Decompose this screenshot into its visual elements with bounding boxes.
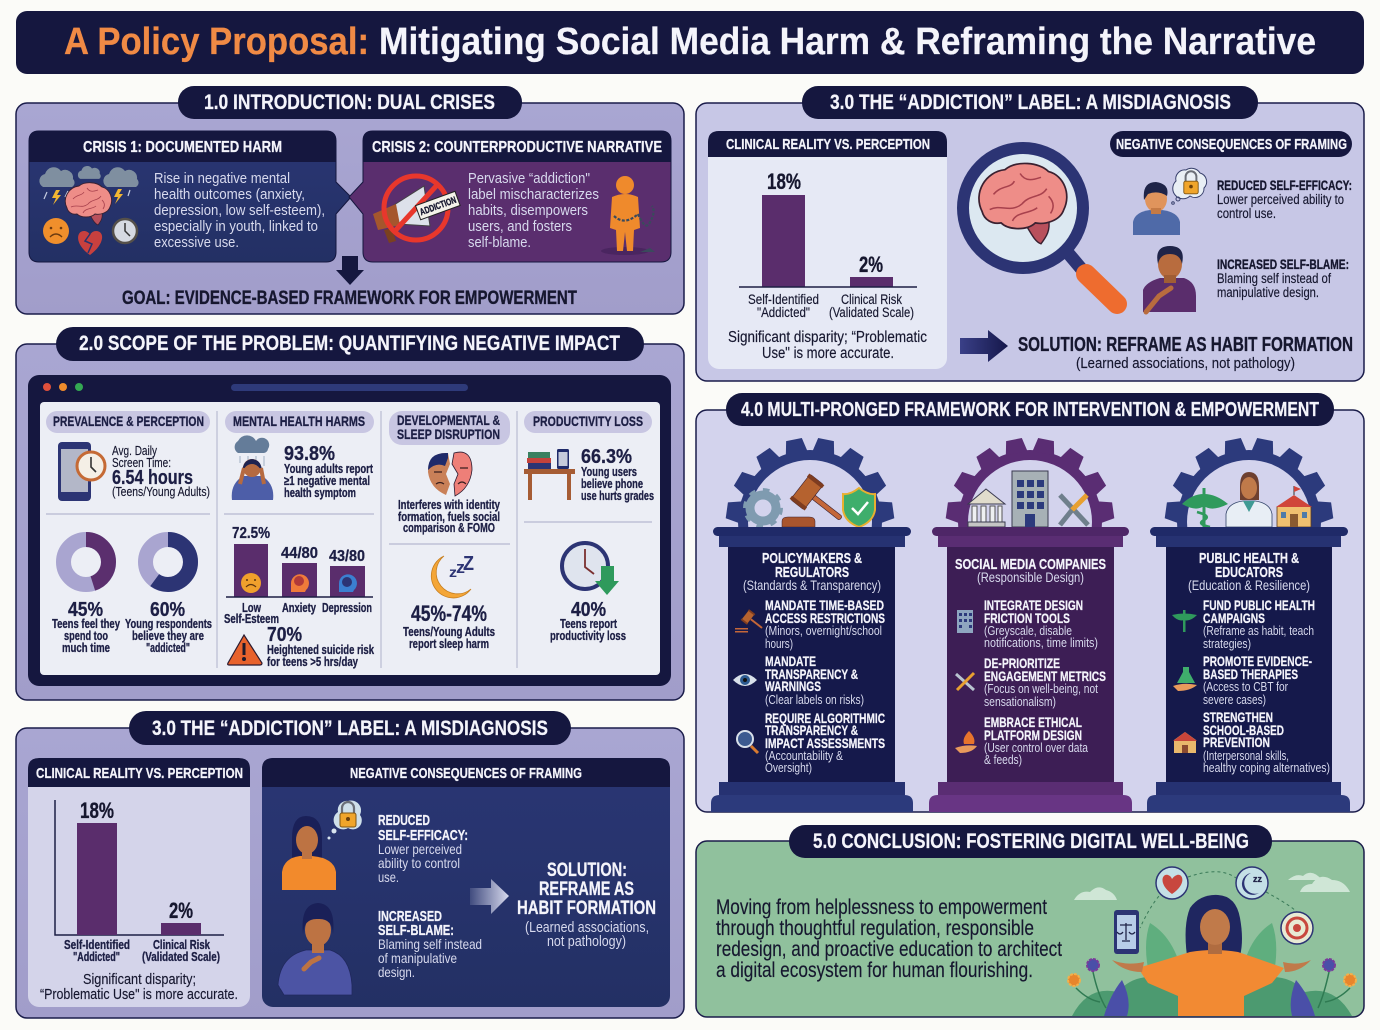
icon: target circle — [1281, 912, 1313, 944]
pillar: policymakers and regulators: TRANSPARENCY & — [765, 722, 858, 738]
bar chart: self-identified vs clinical: Self-Identified — [64, 938, 130, 952]
title banner: Mitigating Social Media Harm & Reframing the Narrative — [379, 21, 1316, 63]
card: negative consequences left: Lower perceived — [378, 841, 462, 857]
bar chart: self-identified vs clinical: (Validated Scale) — [142, 950, 220, 964]
pillar: public health and educators: severe cases) — [1203, 692, 1266, 707]
column: developmental and sleep disruption: Interferes with identity — [398, 498, 500, 512]
pillar: policymakers and regulators: IMPACT ASSESSMENTS — [765, 735, 885, 751]
column: mental health harms — [224, 411, 374, 669]
bar chart: self-identified vs clinical: "Addicted" — [73, 950, 120, 964]
icon: no addiction megaphone: ADDICTION — [418, 195, 458, 218]
icon: distressed person under cloud — [232, 435, 273, 500]
panel: 3.0 addiction label right: manipulative design. — [1217, 285, 1319, 300]
pillar: policymakers and regulators: (Accountability & — [765, 748, 843, 763]
column: prevalence and perception: 45% — [68, 599, 103, 621]
column: prevalence and perception: (Teens/Young Adults) — [112, 485, 210, 499]
column: mental health harms: 70% — [267, 624, 302, 646]
pillar: public health and educators: healthy coping alternatives) — [1203, 760, 1330, 775]
pillar: public health and educators: (Reframe as habit, teach — [1203, 623, 1314, 638]
heading: 3.0 addiction label left: 3.0 THE “ADDICTION” LABEL: A MISDIAGNOSIS — [152, 717, 548, 740]
icon: moon and zzz: Z — [463, 553, 474, 575]
icon: small tools — [956, 673, 974, 690]
text: conclusion statement: redesign, and proactive education to architect — [716, 938, 1062, 961]
browser window frame — [28, 375, 671, 686]
panel: 3.0 addiction label right: control use. — [1217, 206, 1276, 221]
column: mental health harms: 93.8% — [284, 443, 335, 465]
bar chart: self-identified vs clinical — [55, 798, 224, 964]
pillar: policymakers and regulators: REGULATORS — [775, 564, 849, 581]
card: crisis 1 documented harm: especially in youth, linked to — [154, 219, 318, 235]
card: clinical reality right: Significant disparity; “Problematic — [728, 329, 927, 346]
column: productivity loss: productivity loss — [550, 629, 626, 643]
column: productivity loss: Teens report — [560, 617, 618, 631]
pillar: policymakers and regulators: POLICYMAKERS & — [762, 550, 862, 567]
column: mental health harms: for teens >5 hrs/day — [267, 655, 358, 669]
panel: 3.0 addiction label left — [16, 711, 684, 1018]
column: mental health harms: Young adults report — [284, 462, 374, 476]
arrow: to solution right — [960, 330, 1008, 362]
card: crisis 2 counterproductive narrative: Pervasive “addiction" — [468, 171, 590, 187]
card: crisis 1 documented harm: Rise in negative mental — [154, 171, 290, 187]
heading: 1.0 introduction: 1.0 INTRODUCTION: DUAL CRISES — [204, 91, 495, 114]
pillar: policymakers and regulators: REQUIRE ALGORITHMIC — [765, 710, 885, 726]
pillar: policymakers and regulators: Oversight) — [765, 760, 812, 775]
card: negative consequences left: use. — [378, 869, 399, 885]
card: negative consequences left: NEGATIVE CONSEQUENCES OF FRAMING — [350, 765, 582, 782]
bar chart: self-identified vs clinical right: "Addicted" — [757, 305, 810, 320]
card: clinical reality right: CLINICAL REALITY VS. PERCEPTION — [726, 137, 930, 153]
column: prevalence and perception: spend too — [64, 629, 108, 643]
card: negative consequences left: Blaming self instead — [378, 936, 482, 952]
icon: small school — [1173, 732, 1197, 753]
text: solution — [517, 860, 656, 950]
column: prevalence and perception: PREVALENCE & PERCEPTION — [53, 413, 204, 429]
pillar: social media companies: notifications, time limits) — [984, 635, 1098, 650]
card: negative consequences left — [262, 758, 670, 1007]
column: productivity loss: 66.3% — [581, 446, 632, 468]
icons: gear, gavel, shield — [745, 474, 875, 531]
pillar: social media companies: SOCIAL MEDIA COMPANIES — [955, 556, 1106, 573]
pillar: social media companies: INTEGRATE DESIGN — [984, 597, 1083, 613]
card: negative consequences left: INCREASED — [378, 908, 442, 925]
panel: 2.0 scope of the problem — [16, 327, 684, 700]
text: solution: (Learned associations, — [525, 919, 649, 936]
panel: 3.0 addiction label right — [696, 86, 1364, 381]
pillar: social media companies: (Responsible Design) — [977, 569, 1084, 585]
pillar: social media companies: (Greyscale, disable — [984, 623, 1072, 638]
icons: bank, office building, tools — [968, 471, 1088, 527]
text: solution: HABIT FORMATION — [517, 898, 656, 919]
icon: phone and clock — [58, 442, 105, 501]
icon: desk with books and phone — [524, 449, 575, 500]
pillar: policymakers and regulators: (Minors, overnight/school — [765, 623, 882, 638]
pillar: social media companies: PLATFORM DESIGN — [984, 727, 1082, 743]
pillar: social media companies: EMBRACE ETHICAL — [984, 714, 1082, 730]
panel: 5.0 conclusion — [696, 825, 1364, 1017]
bar chart: self-identified vs clinical: 18% — [80, 798, 114, 823]
pillar: policymakers and regulators: (Clear labels on risks) — [765, 692, 864, 707]
column: prevalence and perception: Avg. Daily — [112, 444, 158, 458]
icon: magnifier — [737, 731, 758, 753]
icon: magnifying glass over brain — [963, 148, 1117, 304]
panel: 1.0 introduction — [16, 86, 684, 314]
heading: 3.0 addiction label right — [802, 86, 1258, 119]
text: solution: not pathology) — [547, 933, 626, 950]
pillar: policymakers and regulators: MANDATE TIME-BASED — [765, 597, 884, 613]
pillar: social media companies — [929, 437, 1132, 812]
column: developmental and sleep disruption — [389, 411, 510, 651]
pillar: public health and educators: (Interpersonal skills, — [1203, 748, 1289, 763]
icon: no addiction megaphone — [373, 176, 460, 243]
pillar: social media companies: (User control over data — [984, 740, 1089, 755]
chart: mental health bars: 44/80 — [281, 545, 318, 562]
pillar: policymakers and regulators — [711, 437, 913, 812]
pillar: public health and educators: STRENGTHEN — [1203, 709, 1273, 725]
chart: mental health bars: 72.5% — [232, 525, 270, 542]
column: prevalence and perception: believe they are — [132, 629, 204, 643]
column: productivity loss: PRODUCTIVITY LOSS — [533, 413, 643, 429]
card: crisis 1 documented harm: health outcomes (anxiety, — [154, 187, 305, 203]
card: clinical reality left: Significant disparity; — [83, 971, 196, 988]
icon: phone with scales — [1114, 910, 1139, 954]
card: crisis 1 documented harm: depression, low self-esteem), — [154, 203, 325, 219]
icon: moon and zzz: z — [456, 558, 465, 577]
pillar: public health and educators: BASED THERAPIES — [1203, 666, 1298, 682]
pillar: policymakers and regulators: MANDATE — [765, 653, 816, 669]
chart: donut 60 percent — [146, 540, 190, 584]
icon: small caduceus — [1172, 610, 1197, 632]
icon: moon and zzz — [431, 553, 474, 598]
heading: 3.0 addiction label right: 3.0 THE “ADDICTION” LABEL: A MISDIAGNOSIS — [830, 91, 1231, 114]
pillar: public health and educators — [1147, 437, 1350, 812]
card: negative consequences left: SELF-EFFICACY: — [378, 827, 468, 844]
bar chart: self-identified vs clinical right — [739, 169, 917, 320]
column: developmental and sleep disruption: 45%-74% — [411, 601, 487, 626]
icon: small building — [957, 610, 973, 633]
arrow: to solution — [470, 879, 509, 914]
card: crisis 1 documented harm: CRISIS 1: DOCUMENTED HARM — [83, 139, 282, 156]
panel: 4.0 framework — [696, 393, 1364, 812]
heading: 2.0 scope — [56, 327, 644, 361]
pillar: social media companies: DE-PRIORITIZE — [984, 655, 1060, 671]
column: prevalence and perception: much time — [62, 641, 110, 655]
column: prevalence and perception: Teens feel they — [52, 617, 120, 631]
icon: flask in hand — [1173, 667, 1197, 691]
column: developmental and sleep disruption: Teens/Young Adults — [403, 625, 495, 639]
title banner: A Policy Proposal: — [64, 21, 369, 63]
column: prevalence and perception: 6.54 hours — [112, 467, 193, 489]
column: mental health harms: MENTAL HEALTH HARMS — [233, 413, 365, 429]
column: prevalence and perception — [46, 411, 212, 655]
icon: moon circle: zz — [1253, 874, 1262, 884]
column: developmental and sleep disruption: report sleep harm — [409, 637, 489, 651]
card: negative consequences left: ability to control — [378, 855, 460, 871]
icon: split face — [428, 452, 472, 496]
column: productivity loss: Young users — [581, 465, 637, 479]
pillar: public health and educators: PROMOTE EVIDENCE- — [1203, 653, 1312, 669]
column: developmental and sleep disruption: comparison & FOMO — [403, 521, 495, 535]
chart: mental health bars: Anxiety — [282, 601, 316, 615]
icon: eye — [733, 674, 757, 686]
card: crisis 2 counterproductive narrative: label mischaracterizes — [468, 187, 599, 203]
column: developmental and sleep disruption: SLEEP DISRUPTION — [397, 426, 500, 442]
text: solution: SOLUTION: — [547, 860, 627, 881]
icon: storm clouds, brain, sad face, heart and clock — [39, 166, 139, 255]
card: crisis 2 counterproductive narrative: self-blame. — [468, 235, 531, 251]
pillar: social media companies: & feeds) — [984, 752, 1022, 767]
text: goal: GOAL: EVIDENCE-BASED FRAMEWORK FOR EMPOWERMENT — [122, 288, 577, 309]
card: clinical reality right: Use" is more accurate. — [762, 345, 894, 362]
pillar: public health and educators: (Access to CBT for — [1203, 679, 1289, 694]
pillar: policymakers and regulators: TRANSPARENCY & — [765, 666, 858, 682]
bar chart: self-identified vs clinical right: Self-Identified — [748, 292, 819, 307]
card: crisis 2 counterproductive narrative: CRISIS 2: COUNTERPRODUCTIVE NARRATIVE — [372, 139, 662, 156]
heading: 2.0 scope: 2.0 SCOPE OF THE PROBLEM: QUANTIFYING NEGATIVE IMPACT — [79, 332, 620, 355]
illustration: woman balancing digital well-being — [1068, 867, 1356, 1016]
card: negative consequences left: REDUCED — [378, 812, 430, 829]
text: conclusion statement: Moving from helplessness to empowerment — [716, 896, 1047, 919]
column: prevalence and perception: 60% — [150, 599, 185, 621]
icon: hand with flame — [955, 731, 977, 753]
text: solution right — [1018, 334, 1353, 372]
pillar: policymakers and regulators: ACCESS RESTRICTIONS — [765, 610, 885, 626]
pillar: policymakers and regulators: WARNINGS — [765, 678, 821, 694]
pillar: policymakers and regulators: hours) — [765, 636, 793, 651]
pillar: policymakers and regulators: (Standards & Transparency) — [743, 577, 881, 593]
column: mental health harms: ≥1 negative mental — [284, 474, 370, 488]
icons: caduceus, doctor, school — [1182, 472, 1312, 528]
icon: heart circle — [1156, 867, 1188, 899]
pillar: public health and educators: EDUCATORS — [1215, 564, 1283, 581]
column: prevalence and perception: Screen Time: — [112, 456, 171, 470]
card: clinical reality left: CLINICAL REALITY VS. PERCEPTION — [36, 765, 243, 782]
column: prevalence and perception: Young respondents — [125, 617, 212, 631]
icon: small gavel — [735, 609, 766, 633]
pillar: social media companies: (Focus on well-being, not — [984, 681, 1098, 696]
text: solution: REFRAME AS — [539, 879, 634, 900]
chart: mental health bars: 43/80 — [329, 548, 365, 565]
card: crisis 2 counterproductive narrative — [349, 131, 671, 262]
bar chart: self-identified vs clinical: 2% — [169, 898, 193, 923]
card: clinical reality left: “Problematic Use" is more accurate. — [40, 986, 238, 1003]
chart: mental health bars: Depression — [322, 601, 372, 615]
column: prevalence and perception: "addicted" — [146, 641, 190, 655]
column: developmental and sleep disruption: formation, fuels social — [398, 510, 500, 524]
chart: mental health bars: Low — [242, 601, 261, 615]
chart: donut 45 percent — [64, 540, 108, 584]
icon: moon and zzz: z — [449, 564, 457, 580]
pillar: public health and educators: SCHOOL-BASED — [1203, 722, 1284, 738]
pillar: social media companies: ENGAGEMENT METRICS — [984, 668, 1106, 684]
heading: 1.0 introduction — [178, 86, 522, 119]
heading: 3.0 addiction label left — [129, 711, 571, 745]
pillar: public health and educators: strategies) — [1203, 636, 1251, 651]
arrow: crises to goal — [336, 256, 364, 285]
bar chart: self-identified vs clinical right: Clinical Risk — [841, 292, 902, 307]
card: negative consequences left: SELF-BLAME: — [378, 922, 454, 939]
icon: chained figure — [601, 176, 655, 255]
pillar: social media companies: sensationalism) — [984, 694, 1056, 709]
column: mental health harms: health symptom — [284, 486, 356, 500]
heading: 5.0 conclusion: 5.0 CONCLUSION: FOSTERING DIGITAL WELL-BEING — [813, 830, 1249, 853]
chart: mental health bars — [224, 525, 373, 626]
heading: negative consequences pill — [1110, 131, 1352, 157]
pillar: public health and educators: CAMPAIGNS — [1203, 610, 1265, 626]
bar chart: self-identified vs clinical right: 18% — [767, 169, 801, 194]
pillar: public health and educators: PREVENTION — [1203, 734, 1270, 750]
column: mental health harms: Heightened suicide risk — [267, 643, 374, 657]
chart: mental health bars: Self-Esteem — [224, 612, 279, 626]
heading: 5.0 conclusion — [789, 825, 1272, 858]
card: negative consequences left: design. — [378, 964, 415, 980]
bar chart: self-identified vs clinical right: (Validated Scale) — [829, 305, 914, 320]
panel: 3.0 addiction label right: Blaming self instead of — [1217, 271, 1331, 286]
panel: 3.0 addiction label right: Lower perceived ability to — [1217, 192, 1344, 207]
title banner — [16, 11, 1364, 74]
bar chart: self-identified vs clinical right: 2% — [859, 252, 883, 277]
text: conclusion statement — [716, 896, 1062, 982]
icon: man pointing at self — [278, 903, 352, 995]
column: productivity loss: 40% — [571, 599, 606, 621]
column: productivity loss: believe phone — [581, 477, 643, 491]
text: conclusion statement: through thoughtful regulation, responsible — [716, 917, 1034, 940]
card: crisis 2 counterproductive narrative: users, and fosters — [468, 219, 572, 235]
card: negative consequences left: of manipulative — [378, 950, 457, 966]
pillar: public health and educators: PUBLIC HEALTH & — [1199, 550, 1299, 567]
card: clinical reality left — [28, 758, 250, 1007]
card: clinical reality right — [708, 131, 947, 369]
column: developmental and sleep disruption: DEVELOPMENTAL & — [397, 412, 500, 428]
text: solution right: (Learned associations, not pathology) — [1076, 355, 1295, 372]
column: productivity loss — [524, 411, 654, 643]
pillar: social media companies: FRICTION TOOLS — [984, 610, 1070, 626]
text: conclusion statement: a digital ecosystem for human flourishing. — [716, 959, 1033, 982]
card: crisis 2 counterproductive narrative: habits, disempowers — [468, 203, 588, 219]
icon: man with lock thought — [1133, 168, 1207, 235]
pillar: public health and educators: FUND PUBLIC HEALTH — [1203, 597, 1315, 613]
icon: clock with down arrow — [562, 543, 619, 595]
heading: 4.0 framework — [726, 393, 1334, 426]
pillar: public health and educators: (Education & Resilience) — [1188, 577, 1310, 593]
card: crisis 1 documented harm — [29, 131, 351, 262]
icon: warning triangle — [228, 635, 262, 665]
icon: moon circle — [1236, 867, 1268, 899]
bar chart: self-identified vs clinical: Clinical Risk — [153, 938, 210, 952]
card: crisis 1 documented harm: excessive use. — [154, 235, 239, 251]
icon: woman with lock thought — [282, 801, 362, 890]
column: productivity loss: use hurts grades — [581, 489, 654, 503]
icon: man pointing to self — [1143, 246, 1196, 312]
